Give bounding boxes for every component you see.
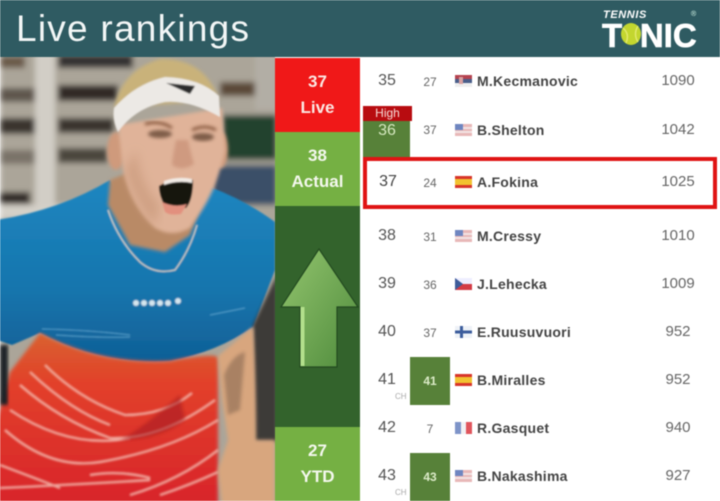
icon: up arrow [280, 248, 359, 368]
row 39: 39 [378, 275, 396, 292]
teeth [164, 178, 192, 185]
text: B.Miralles [477, 372, 546, 388]
necklace [108, 210, 197, 271]
shirt: blue folds and logo [42, 308, 245, 337]
logo word: tonic: TONIC [602, 17, 697, 54]
flag: Spain [454, 373, 473, 387]
icon: tennis ball [620, 22, 642, 46]
sidebar: ytd rank [275, 427, 360, 501]
face [118, 108, 225, 233]
row 36 highlight [363, 121, 410, 157]
text: 1010 [661, 227, 695, 244]
text: 1009 [661, 275, 695, 292]
actual label: Actual [292, 172, 343, 191]
row 38: 38 [378, 227, 396, 244]
live number: 37 [308, 72, 327, 91]
logo: Tennis Tonic [601, 9, 697, 54]
high marker: High [375, 106, 400, 120]
text: 7 [427, 422, 433, 436]
row 41: 41 [378, 371, 396, 388]
shirt: white stripes [0, 365, 218, 495]
text: 952 [665, 371, 691, 388]
text: 1090 [661, 72, 695, 89]
text: M.Kecmanovic [477, 73, 578, 89]
mouth [159, 179, 193, 208]
challenger age badge: 41 [423, 374, 437, 388]
flag: Spain [454, 175, 473, 189]
header bar [0, 0, 720, 57]
shirt logo [133, 298, 181, 306]
arm hair shadow [224, 352, 245, 415]
tongue [162, 202, 187, 215]
headband logo [166, 83, 195, 94]
text: 940 [665, 419, 691, 436]
text: B.Shelton [477, 122, 545, 138]
ytd number: 27 [308, 441, 327, 460]
text: 31 [423, 230, 437, 244]
flag: USA [454, 469, 472, 482]
flag: USA [454, 123, 472, 136]
text: 927 [665, 467, 691, 484]
text: 24 [423, 176, 437, 190]
text: 27 [423, 75, 437, 89]
challenger age badge: 43 [423, 470, 437, 484]
flag: Finland [454, 325, 473, 339]
text: CH [395, 488, 407, 497]
high marker [363, 106, 412, 121]
text: B.Nakashima [477, 468, 568, 484]
face shading [125, 150, 160, 226]
shirt: red lower [0, 333, 218, 501]
hair [114, 59, 219, 108]
ytd label: YTD [300, 467, 334, 486]
highlighted row box [363, 157, 717, 209]
flag: France [454, 421, 473, 435]
blurred stadium background [0, 50, 285, 501]
text: 37 [423, 326, 437, 340]
text: 952 [665, 323, 691, 340]
text: J.Lehecka [477, 276, 547, 292]
right arm and hand [218, 327, 275, 501]
actual number: 38 [308, 146, 327, 165]
challenger age badge [410, 357, 450, 405]
title: Live rankings [16, 8, 250, 49]
logo word: tennis: TENNIS [603, 9, 647, 21]
text: A.Fokina [477, 174, 538, 190]
text: 1042 [661, 121, 695, 138]
row 43: 43 [378, 467, 396, 484]
sidebar: live rank [275, 58, 360, 132]
player photo [0, 56, 276, 501]
registered mark: ® [691, 11, 696, 18]
challenger age badge [410, 453, 450, 501]
row 42: 42 [378, 419, 396, 436]
text: 36 [378, 122, 396, 139]
text: R.Gasquet [477, 420, 549, 436]
left arm shadow [0, 345, 8, 405]
sidebar: arrow panel [275, 206, 360, 427]
flag: Czechia [454, 278, 473, 291]
row 40: 40 [378, 323, 396, 340]
text: CH [395, 392, 407, 401]
text: 37 [423, 123, 437, 137]
shirt: blue upper [0, 180, 275, 361]
flag: Serbia [454, 74, 473, 87]
text: M.Cressy [477, 228, 541, 244]
row 35: 35 [378, 72, 396, 89]
text: 1025 [661, 173, 695, 190]
ears [107, 132, 228, 170]
headband [114, 77, 220, 132]
eyes and brows [145, 123, 216, 141]
text: 37 [379, 173, 397, 190]
neck [108, 165, 215, 252]
live label: Live [300, 98, 335, 117]
sidebar: actual rank [275, 132, 360, 206]
text: 36 [423, 278, 437, 292]
text: E.Ruusuvuori [477, 324, 571, 340]
flag: USA [454, 229, 472, 242]
background right of arm [253, 275, 277, 442]
nose [172, 140, 194, 168]
dark shirt band [120, 395, 185, 440]
